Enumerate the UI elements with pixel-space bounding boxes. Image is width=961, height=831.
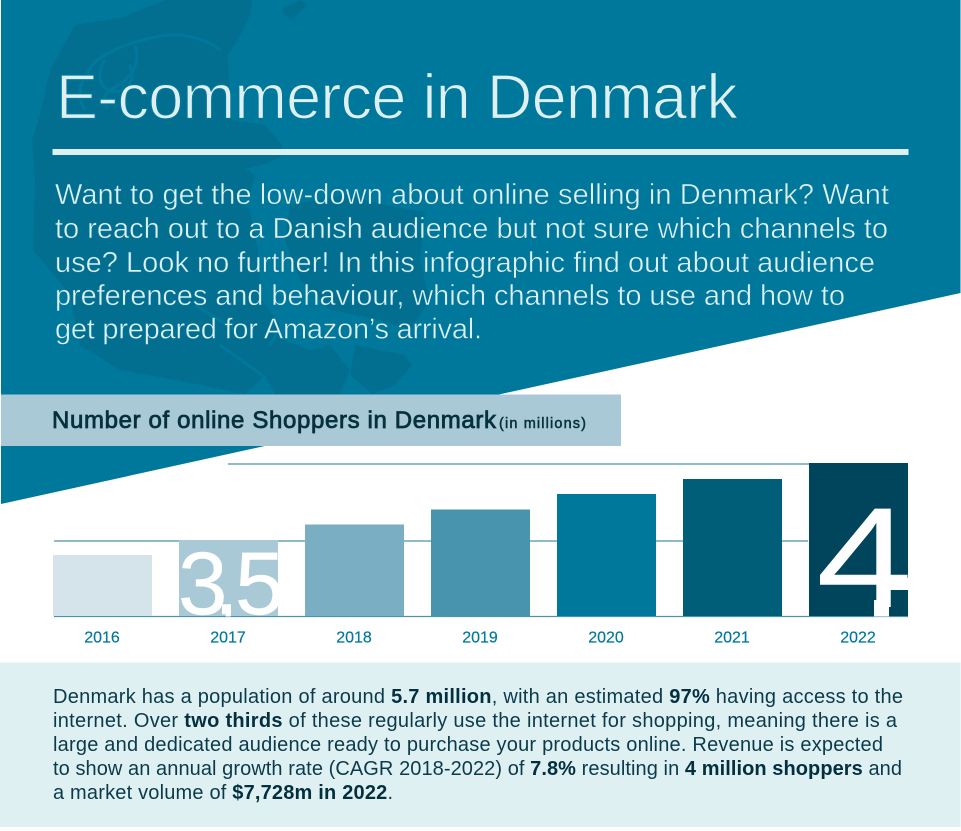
chart heading band	[1, 394, 621, 446]
chart heading: (in millions)	[499, 416, 586, 432]
year labels: 2017	[210, 630, 246, 646]
bar: 2022	[809, 463, 908, 616]
summary text: to show an annual growth rate (CAGR 2018-2022) of 7.8% resulting in 4 million shoppers and	[53, 758, 902, 780]
title rule	[52, 149, 908, 155]
summary text: internet. Over two thirds of these regularly use the internet for shopping, meaning there is a	[53, 710, 898, 732]
intro paragraph: Want to get the low-down about online selling in Denmark? Want	[55, 179, 889, 211]
year labels: 2016	[84, 630, 120, 646]
year labels	[84, 630, 876, 646]
chart heading: Number of online Shoppers in Denmark	[52, 407, 497, 434]
bar: 2021	[683, 479, 782, 616]
intro paragraph: to reach out to a Danish audience but not sure which channels to	[55, 213, 888, 245]
bar chart	[53, 463, 913, 646]
intro paragraph: use? Look no further! In this infographic find out about audience	[55, 247, 875, 279]
year labels: 2019	[462, 630, 498, 646]
bar: 2016	[53, 555, 152, 616]
bar: 2020	[557, 494, 656, 616]
header background	[1, 0, 960, 504]
summary panel	[0, 662, 960, 827]
summary text: a market volume of $7,728m in 2022.	[53, 782, 393, 804]
summary text: Denmark has a population of around 5.7 million, with an estimated 97% having access to the	[53, 686, 903, 708]
title: E-commerce in Denmark	[56, 62, 738, 132]
bar: 2018	[305, 524, 404, 616]
summary text: large and dedicated audience ready to purchase your products online. Revenue is expected	[53, 734, 883, 756]
bar: 2019	[431, 510, 530, 616]
bar: 2017	[179, 540, 278, 616]
summary text	[53, 686, 903, 804]
value: 4	[820, 508, 908, 616]
year labels: 2021	[714, 630, 750, 646]
year labels: 2020	[588, 630, 624, 646]
intro paragraph: get prepared for Amazon’s arrival.	[55, 314, 482, 346]
map of Denmark	[32, 0, 430, 394]
year labels: 2022	[840, 630, 876, 646]
intro paragraph: preferences and behaviour, which channels to use and how to	[55, 280, 845, 312]
year labels: 2018	[336, 630, 372, 646]
value: 3,5: 3,5	[178, 533, 284, 633]
value: 4: 4	[816, 478, 913, 638]
intro paragraph	[55, 179, 889, 346]
